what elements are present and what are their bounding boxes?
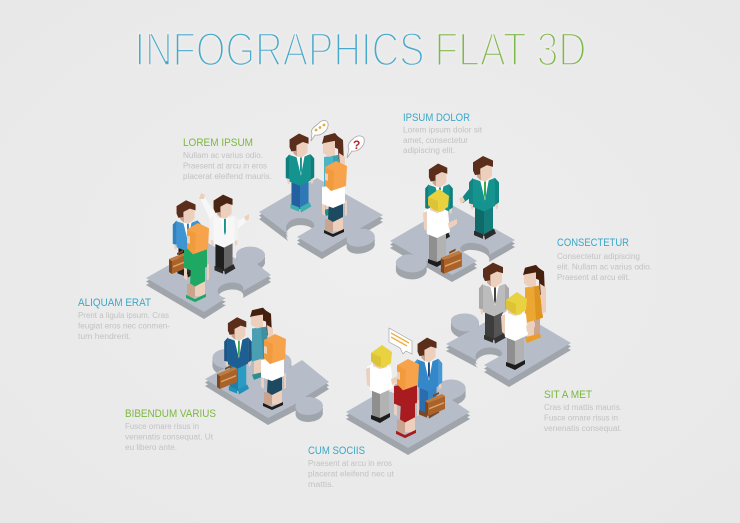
person: orange hair woman xyxy=(261,334,286,410)
text block: sit a met: venenatis consequat. xyxy=(544,423,622,433)
puzzle piece xyxy=(346,376,470,455)
text block: ipsum dolor: adipiscing elit. xyxy=(403,145,455,155)
panel: lorem ipsum puzzle group xyxy=(259,120,383,259)
person: man with raised arms xyxy=(199,193,249,275)
title: INFOGRAPHICS xyxy=(134,22,424,76)
text block: sit a met xyxy=(544,389,622,433)
icon: briefcase xyxy=(425,392,445,416)
text block: bibendum varius: eu libero ante. xyxy=(125,442,177,452)
text block: ipsum dolor: amet, consectetur xyxy=(403,135,468,145)
person: grey jacket man xyxy=(479,263,509,344)
person: green dress woman xyxy=(184,223,209,302)
text block: cum sociis: CUM SOCIIS xyxy=(308,445,365,457)
text block: consectetur xyxy=(557,237,652,282)
puzzle piece xyxy=(146,243,271,319)
puzzle piece xyxy=(205,343,329,425)
text block: ipsum dolor xyxy=(403,112,483,155)
text block: consectetur: Consectetur adipiscing xyxy=(557,251,640,261)
person: red dress woman xyxy=(394,359,419,438)
text block: lorem ipsum: Praesent at arcu in eros xyxy=(183,160,267,170)
person: teal jacket man xyxy=(286,133,314,213)
person: blue shirt man xyxy=(173,200,201,278)
panel: consectetur puzzle group xyxy=(446,263,571,387)
person: blue suit man xyxy=(414,338,442,419)
person: navy suit man xyxy=(224,317,252,395)
title: FLAT 3D xyxy=(434,22,586,76)
person: blond man xyxy=(423,189,457,267)
panel: ipsum dolor puzzle group xyxy=(390,156,515,282)
text block: sit a met: SIT A MET xyxy=(544,389,592,401)
text block: aliquam erat xyxy=(78,297,170,341)
text block: bibendum varius: BIBENDUM VARIUS xyxy=(125,408,216,420)
panel: bibendum varius puzzle group xyxy=(205,308,329,425)
puzzle piece xyxy=(390,205,515,282)
text block: aliquam erat: feugiat eros nec conmen- xyxy=(78,320,170,330)
person: orange hair woman xyxy=(322,161,347,237)
text block: sit a met: Fusce ornare risus in xyxy=(544,412,618,422)
person: blond man xyxy=(501,292,535,370)
text block: ipsum dolor: IPSUM DOLOR xyxy=(403,112,470,124)
speech bubble: text lines xyxy=(389,328,412,354)
text block: lorem ipsum: placerat eleifend mauris. xyxy=(183,171,272,181)
person: teal suit man xyxy=(459,156,499,240)
text block: consectetur: elit. Nullam ac varius odio. xyxy=(557,262,652,272)
text block: bibendum varius: Fusce ornare risus in xyxy=(125,421,199,431)
person: teal dress woman xyxy=(250,308,273,380)
text block: sit a met: Cras id mattis mauris. xyxy=(544,402,622,412)
icon: briefcase xyxy=(217,365,237,389)
text block: cum sociis: mattis. xyxy=(308,479,334,489)
text block: lorem ipsum: LOREM IPSUM xyxy=(183,137,253,149)
speech bubble: question: ? xyxy=(353,138,360,152)
icon: briefcase xyxy=(169,250,189,274)
text block: consectetur: Praesent at arcu elit. xyxy=(557,272,630,282)
text block: aliquam erat: ALIQUAM ERAT xyxy=(78,297,151,309)
text block: lorem ipsum xyxy=(183,137,272,181)
panel: aliquam erat puzzle group xyxy=(146,193,271,319)
puzzle piece xyxy=(259,178,383,259)
person: teal dress woman xyxy=(322,133,345,216)
person: orange dress woman xyxy=(523,265,546,343)
text block: bibendum varius: venenatis consequat. Ut xyxy=(125,432,214,442)
panel: cum sociis puzzle group xyxy=(346,328,470,455)
text block: aliquam erat: tum hendrerit. xyxy=(78,331,131,341)
text block: ipsum dolor: Lorem ipsum dolor sit xyxy=(403,124,483,134)
speech bubble: dots xyxy=(311,120,328,141)
puzzle piece xyxy=(446,307,571,387)
person: teal jacket man behind xyxy=(425,163,453,243)
person: blond man xyxy=(366,345,400,423)
text block: bibendum varius xyxy=(125,408,216,452)
text block: lorem ipsum: Nullam ac varius odio. xyxy=(183,150,263,160)
text block: cum sociis xyxy=(308,445,395,489)
icon: briefcase xyxy=(441,249,462,274)
text block: cum sociis: placerat eleifend nec ut xyxy=(308,468,395,478)
text block: aliquam erat: Prent a ligula ipsum. Cras xyxy=(78,310,169,320)
text block: consectetur: CONSECTETUR xyxy=(557,237,629,249)
text block: cum sociis: Praesent at arcu in eros xyxy=(308,458,392,468)
